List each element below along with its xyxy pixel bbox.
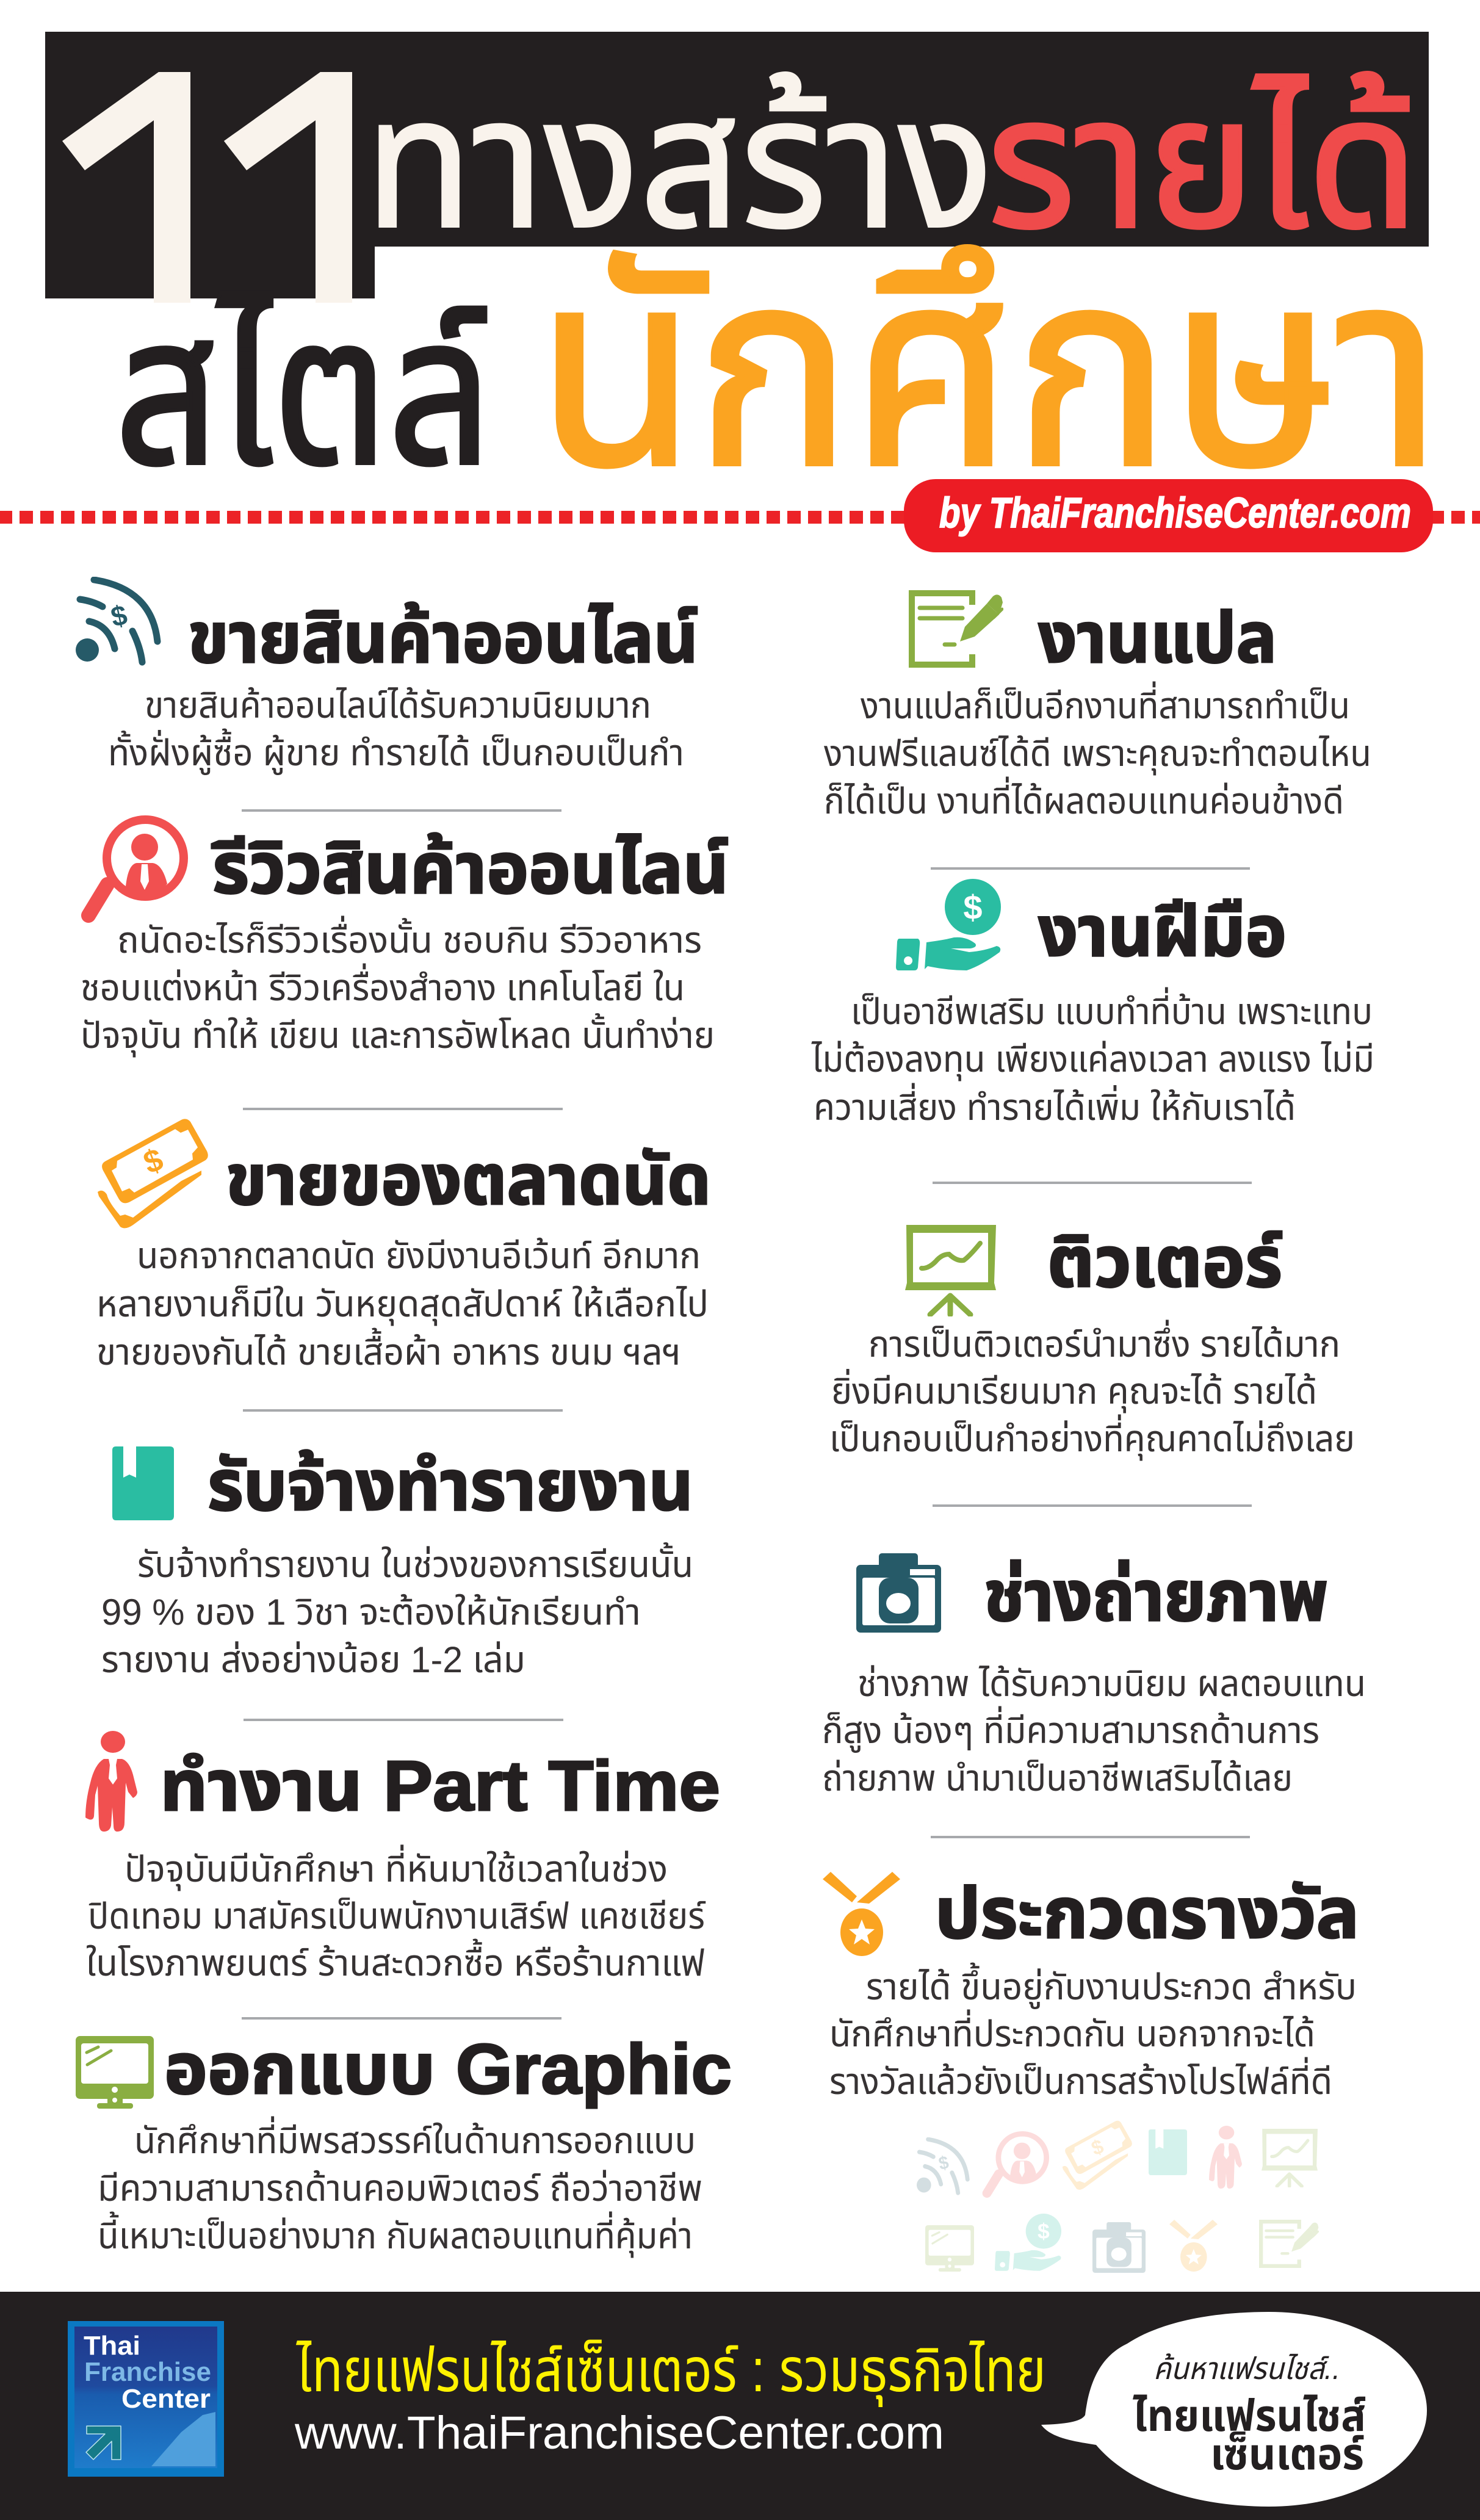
body text: นี้เหมาะเป็นอย่างมาก กับผลตอบแทนที่คุ้มค่า bbox=[98, 2211, 693, 2258]
big number 11 bbox=[62, 72, 352, 303]
big number 11: 1 bbox=[231, 0, 421, 375]
body text: งานฟรีแลนซ์ได้ดี เพราะคุณจะทำตอนไหน bbox=[824, 733, 1371, 776]
body text: ปัจจุบันมีนักศึกษา ที่หันมาใช้เวลาในช่วง bbox=[125, 1844, 668, 1891]
byline pill bbox=[904, 479, 1433, 552]
item: tutor bbox=[829, 1222, 1355, 1461]
logo: Thai Franchise Center: Franchise bbox=[84, 2357, 211, 2387]
speech bubble: ไทยแฟรนไชส์ bbox=[1133, 2392, 1366, 2441]
logo: Thai Franchise Center: Center bbox=[121, 2384, 211, 2414]
item: contests bbox=[823, 1872, 1359, 2102]
body text: รายได้ ขึ้นอยู่กับงานประกวด สำหรับ bbox=[866, 1962, 1357, 2009]
icon: book bbox=[112, 1446, 174, 1520]
item: handicraft bbox=[811, 879, 1374, 1128]
body text: รายงาน ส่งอย่างน้อย 1-2 เล่ม bbox=[101, 1639, 525, 1680]
body text: ปัจจุบัน ทำให้ เขียน และการอัพโหลด นั้นทำง่าย bbox=[81, 1013, 715, 1058]
body text: ชอบแต่งหน้า รีวิวเครื่องสำอาง เทคโนโลยี ใน bbox=[81, 963, 685, 1008]
heading: ประกวดรางวัล bbox=[935, 1874, 1359, 1953]
title line 2 orange: นักศึกษา bbox=[537, 218, 1442, 522]
body text bbox=[96, 1235, 709, 1373]
speech bubble bbox=[1041, 2312, 1427, 2507]
icon: note and pen bbox=[912, 593, 1003, 665]
heading: งานแปล bbox=[1038, 598, 1277, 677]
icon: presentation chart bbox=[905, 1225, 996, 1315]
heading: ติวเตอร์ bbox=[1047, 1222, 1282, 1302]
slogan: ไทยแฟรนไชส์เซ็นเตอร์ : รวมธุรกิจไทย bbox=[295, 2336, 1046, 2407]
body text: ขายสินค้าออนไลน์ได้รับความนิยมมาก bbox=[145, 685, 651, 726]
body text: ยิ่งมีคนมาเรียนมาก คุณจะได้ รายได้ bbox=[831, 1369, 1317, 1413]
heading: ขายของตลาดนัด bbox=[226, 1140, 711, 1219]
body text: ก็สูง น้องๆ ที่มีความสามารถด้านการ bbox=[822, 1706, 1319, 1753]
body text: ถนัดอะไรก็รีวิวเรื่องนั้น ชอบกิน รีวิวอาหาร bbox=[117, 915, 702, 961]
body text bbox=[101, 1542, 693, 1680]
item: report writing bbox=[101, 1446, 693, 1680]
website url: www.ThaiFranchiseCenter.com bbox=[294, 2407, 944, 2459]
body text: นักศึกษาที่ประกวดกัน นอกจากจะได้ bbox=[829, 2009, 1315, 2054]
body text: รับจ้างทำรายงาน ในช่วงของการเรียนนั้น bbox=[137, 1542, 693, 1585]
body text: การเป็นติวเตอร์นำมาซึ่ง รายได้มาก bbox=[868, 1320, 1340, 1365]
footer band bbox=[0, 2292, 1480, 2520]
heading: รีวิวสินค้าออนไลน์ bbox=[211, 829, 729, 908]
title line 1 red: รายได้ bbox=[987, 60, 1418, 265]
icon: hand with coin bbox=[896, 879, 1001, 970]
red dashed divider bbox=[0, 511, 1480, 524]
logo: Thai Franchise Center bbox=[68, 2321, 224, 2477]
body text bbox=[829, 1320, 1355, 1461]
body text: นักศึกษาที่มีพรสวรรค์ในด้านการออกแบบ bbox=[134, 2116, 696, 2161]
item: part time bbox=[85, 1731, 720, 1984]
title line 1 white: ทางสร้าง bbox=[365, 60, 994, 265]
logo: Thai Franchise Center: Thai bbox=[84, 2331, 140, 2361]
icon: wifi money bbox=[76, 580, 157, 662]
body text: ก็ได้เป็น งานที่ได้ผลตอบแทนค่อนข้างดี bbox=[824, 776, 1344, 821]
body text bbox=[824, 681, 1371, 821]
body text: เป็นกอบเป็นกำอย่างที่คุณคาดไม่ถึงเลย bbox=[829, 1414, 1355, 1461]
body text bbox=[811, 987, 1374, 1128]
icon: camera bbox=[856, 1553, 941, 1633]
body text: งานแปลก็เป็นอีกงานที่สามารถทำเป็น bbox=[861, 681, 1350, 726]
faded icon collage bbox=[917, 2121, 1318, 2273]
heading: ออกแบบ Graphic bbox=[164, 2029, 732, 2109]
speech bubble: เซ็นเตอร์ bbox=[1210, 2430, 1364, 2479]
heading: ขายสินค้าออนไลน์ bbox=[188, 598, 698, 677]
body text: ไม่ต้องลงทุน เพียงแค่ลงเวลา ลงแรง ไม่มี bbox=[811, 1039, 1374, 1081]
title line 2 dark: สไตล์ bbox=[115, 276, 492, 508]
item: translation bbox=[824, 593, 1371, 821]
body text: ถ่ายภาพ นำมาเป็นอาชีพเสริมได้เลย bbox=[822, 1758, 1293, 1799]
icon: magnifier person bbox=[88, 820, 184, 915]
body text: เป็นอาชีพเสริม แบบทำที่บ้าน เพราะแทบ bbox=[851, 987, 1373, 1032]
title black banner bbox=[45, 32, 1429, 298]
item: photographer bbox=[822, 1553, 1366, 1799]
body text: รางวัลแล้วยังเป็นการสร้างโปรไฟล์ที่ดี bbox=[829, 2057, 1332, 2102]
icon: medal bbox=[823, 1872, 900, 1956]
body text bbox=[108, 685, 684, 775]
icon: banknotes bbox=[98, 1119, 208, 1228]
body text: นอกจากตลาดนัด ยังมีงานอีเว้นท์ อีกมาก bbox=[137, 1235, 701, 1276]
heading: ทำงาน Part Time bbox=[160, 1746, 720, 1825]
body text: หลายงานก็มีใน วันหยุดสุดสัปดาห์ ให้เลือกไป bbox=[96, 1283, 709, 1326]
heading: งานฝีมือ bbox=[1038, 892, 1287, 971]
item: sell online bbox=[76, 580, 698, 775]
icon: monitor bbox=[76, 2036, 154, 2109]
body text: ปิดเทอม มาสมัครเป็นพนักงานเสิร์ฟ แคชเชียร์ bbox=[88, 1896, 706, 1937]
heading: ช่างถ่ายภาพ bbox=[984, 1556, 1328, 1636]
body text bbox=[822, 1663, 1366, 1799]
big number 11: 1 bbox=[70, 0, 259, 375]
body text: ทั้งฝั่งผู้ซื้อ ผู้ขาย ทำรายได้ เป็นกอบเป็นกำ bbox=[108, 728, 684, 775]
heading: รับจ้างทำรายงาน bbox=[208, 1446, 693, 1525]
body text: มีความสามารถด้านคอมพิวเตอร์ ถือว่าอาชีพ bbox=[98, 2168, 702, 2209]
item: review online bbox=[81, 820, 729, 1058]
icon: person with tie bbox=[85, 1731, 137, 1832]
body text: 99 % ของ 1 วิชา จะต้องให้นักเรียนทำ bbox=[101, 1592, 641, 1633]
body text bbox=[829, 1962, 1357, 2102]
item: graphic design bbox=[76, 2029, 732, 2258]
speech bubble: ค้นหาแฟรนไชส์.. bbox=[1153, 2352, 1340, 2386]
body text: ช่างภาพ ได้รับความนิยม ผลตอบแทน bbox=[857, 1663, 1366, 1704]
item: flea market bbox=[96, 1119, 711, 1373]
body text bbox=[81, 915, 715, 1058]
body text: ความเสี่ยง ทำรายได้เพิ่ม ให้กับเราได้ bbox=[814, 1083, 1296, 1128]
body text: ในโรงภาพยนตร์ ร้านสะดวกซื้อ หรือร้านกาแฟ bbox=[86, 1938, 705, 1984]
body text bbox=[86, 1844, 706, 1984]
body text: ขายของกันได้ ขายเสื้อผ้า อาหาร ขนม ฯลฯ bbox=[96, 1327, 681, 1373]
title block bbox=[45, 32, 1429, 469]
body text bbox=[98, 2116, 702, 2258]
